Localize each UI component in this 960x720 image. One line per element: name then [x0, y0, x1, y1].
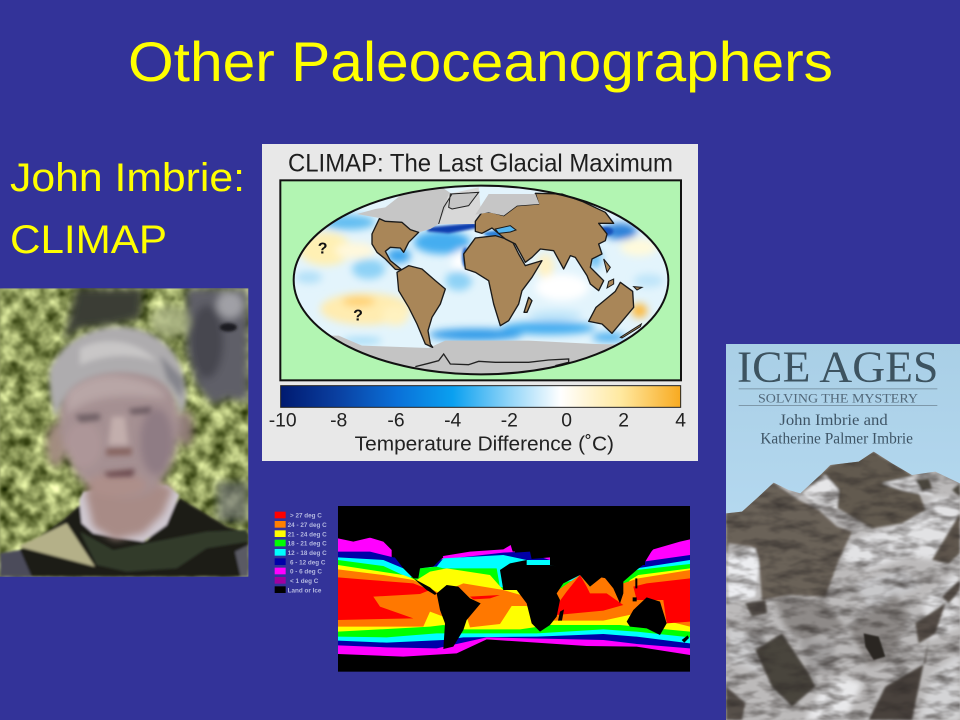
ice: North America — [357, 187, 452, 232]
legend: sea-surface temperature key — [275, 512, 327, 594]
book authors: Katherine Palmer Imbrie — [760, 430, 913, 447]
book cover: Ice Ages — [726, 342, 960, 720]
colour bar labels: 2 — [618, 411, 629, 432]
sub-element: robe — [0, 485, 248, 577]
colour bar labels: 4 — [675, 411, 686, 432]
Antarctica outline — [415, 354, 569, 367]
ocean temperature anomalies — [295, 215, 664, 344]
book authors — [760, 414, 912, 444]
text block: John Imbrie, CLIMAP: John Imbrie: — [10, 156, 245, 200]
colour bar labels: -8 — [330, 411, 347, 432]
question marks: ? — [318, 241, 328, 258]
text block: John Imbrie, CLIMAP: CLIMAP — [10, 218, 167, 262]
colour bar labels: -10 — [269, 411, 297, 432]
chart title: CLIMAP: The Last Glacial Maximum — [288, 149, 673, 177]
colour bar labels — [269, 411, 686, 432]
mountain — [726, 450, 960, 720]
colour bar labels: -6 — [387, 411, 405, 432]
legend: sea-surface temperature key: < 1 deg C — [290, 578, 319, 585]
legend: sea-surface temperature key: 24 - 27 deg C — [288, 522, 327, 529]
chart: sea-surface temperature world map — [338, 506, 690, 672]
Greenland outline — [439, 192, 479, 224]
ice: Eurasia — [475, 194, 539, 216]
colour bar labels: -4 — [444, 411, 462, 432]
ice: Greenland and Nordic seas — [439, 187, 482, 224]
title: Other Paleoceanographers — [128, 30, 833, 93]
text block: John Imbrie, CLIMAP — [10, 156, 245, 262]
legend: sea-surface temperature key: 0 - 6 deg C — [290, 569, 322, 576]
legend: sea-surface temperature key: 12 - 18 deg C — [288, 550, 327, 557]
book title: ICE AGES — [737, 342, 938, 391]
map panel: ? — [353, 307, 363, 324]
sub-element: hair — [49, 327, 186, 417]
legend: sea-surface temperature key: 6 - 12 deg C — [290, 559, 326, 566]
chart: CLIMAP Last Glacial Maximum map — [262, 144, 698, 461]
legend: sea-surface temperature key: > 27 deg C — [290, 513, 322, 520]
colour bar labels: -2 — [501, 411, 518, 432]
continents — [372, 193, 634, 347]
axis label: Temperature Difference (˚C) — [355, 433, 614, 456]
colour bar labels: 0 — [561, 411, 572, 432]
map panel — [280, 180, 681, 384]
sea ice and Antarctica — [332, 336, 616, 374]
sub-element: neck and face — [47, 353, 193, 540]
book authors: John Imbrie and — [779, 412, 888, 429]
colour bar — [269, 386, 686, 432]
book subtitle: SOLVING THE MYSTERY — [758, 391, 918, 405]
legend: sea-surface temperature key: 18 - 21 deg C — [288, 541, 327, 548]
legend: sea-surface temperature key: Land or Ice — [288, 587, 322, 594]
photo: John Imbrie portrait — [0, 288, 248, 577]
legend: sea-surface temperature key: 21 - 24 deg C — [288, 531, 327, 538]
decorative rules — [739, 388, 937, 389]
